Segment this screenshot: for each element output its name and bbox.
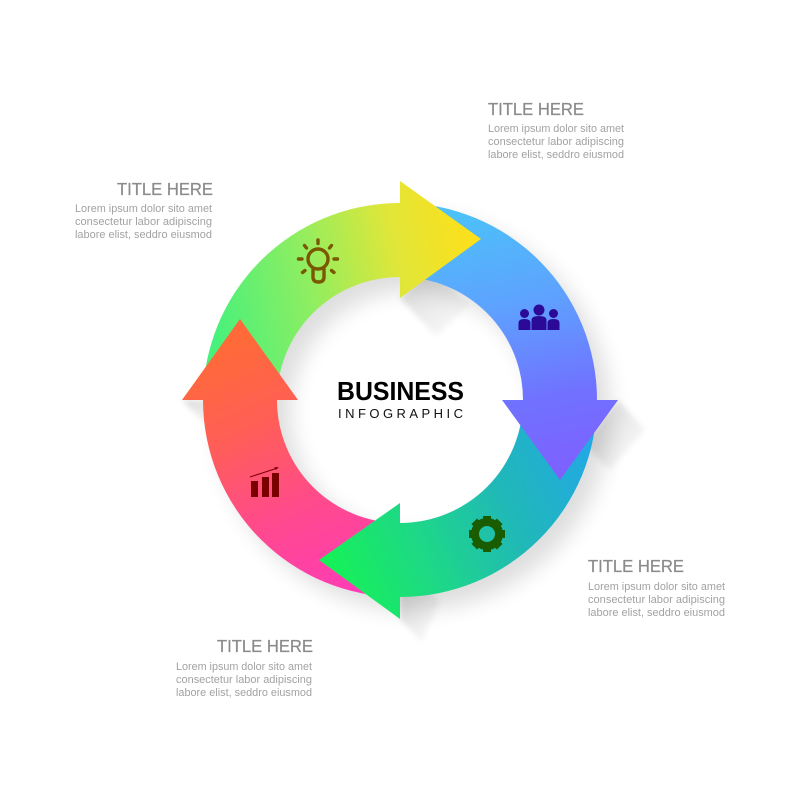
text block: top left: labore elist, seddro eiusmod [75,229,212,241]
band: blue to green arrow body [398,400,597,597]
text block: top right: TITLE HERE [488,99,584,119]
arrowhead long shadows [182,268,645,642]
text block: bottom left [176,636,313,699]
icon: bar chart [250,467,279,497]
text block: top right: Lorem ipsum dolor sito amet [488,123,624,135]
text block: bottom left: TITLE HERE [217,636,313,656]
arrowhead: yellow [400,181,481,298]
text block: top left: Lorem ipsum dolor sito amet [75,203,212,215]
text block: top left: consectetur labor adipiscing [75,216,212,228]
text block: bottom left: Lorem ipsum dolor sito amet [176,661,312,673]
text block: bottom right: Lorem ipsum dolor sito amet [588,581,725,593]
icon: gear [469,516,505,552]
text block: bottom left: labore elist, seddro eiusmod [176,687,312,699]
text block: bottom right: labore elist, seddro eiusmod [588,607,725,619]
arrowhead: violet [502,400,618,480]
text block: top right [488,99,624,161]
text block: top left [75,179,213,241]
text block: top right: consectetur labor adipiscing [488,136,624,148]
arrowhead: orange [182,319,298,400]
text block: bottom right: consectetur labor adipiscing [588,594,725,606]
center title [337,376,464,421]
band: blue to violet arrow body [400,203,597,402]
text block: top left: TITLE HERE [117,179,213,199]
center title: BUSINESS [337,376,464,406]
text block: top right: labore elist, seddro eiusmod [488,149,624,161]
icon: light bulb [298,240,338,282]
band: green to yellow arrow body [203,203,402,400]
icon: team of people [518,304,560,330]
text block: bottom right [588,556,725,619]
band: pink to orange arrow body [203,398,400,597]
arrowhead: green [319,503,400,619]
ring drop shadow [216,216,610,610]
center title: INFOGRAPHIC [338,406,463,421]
text block: bottom left: consectetur labor adipiscing [176,674,312,686]
text block: bottom right: TITLE HERE [588,556,684,576]
